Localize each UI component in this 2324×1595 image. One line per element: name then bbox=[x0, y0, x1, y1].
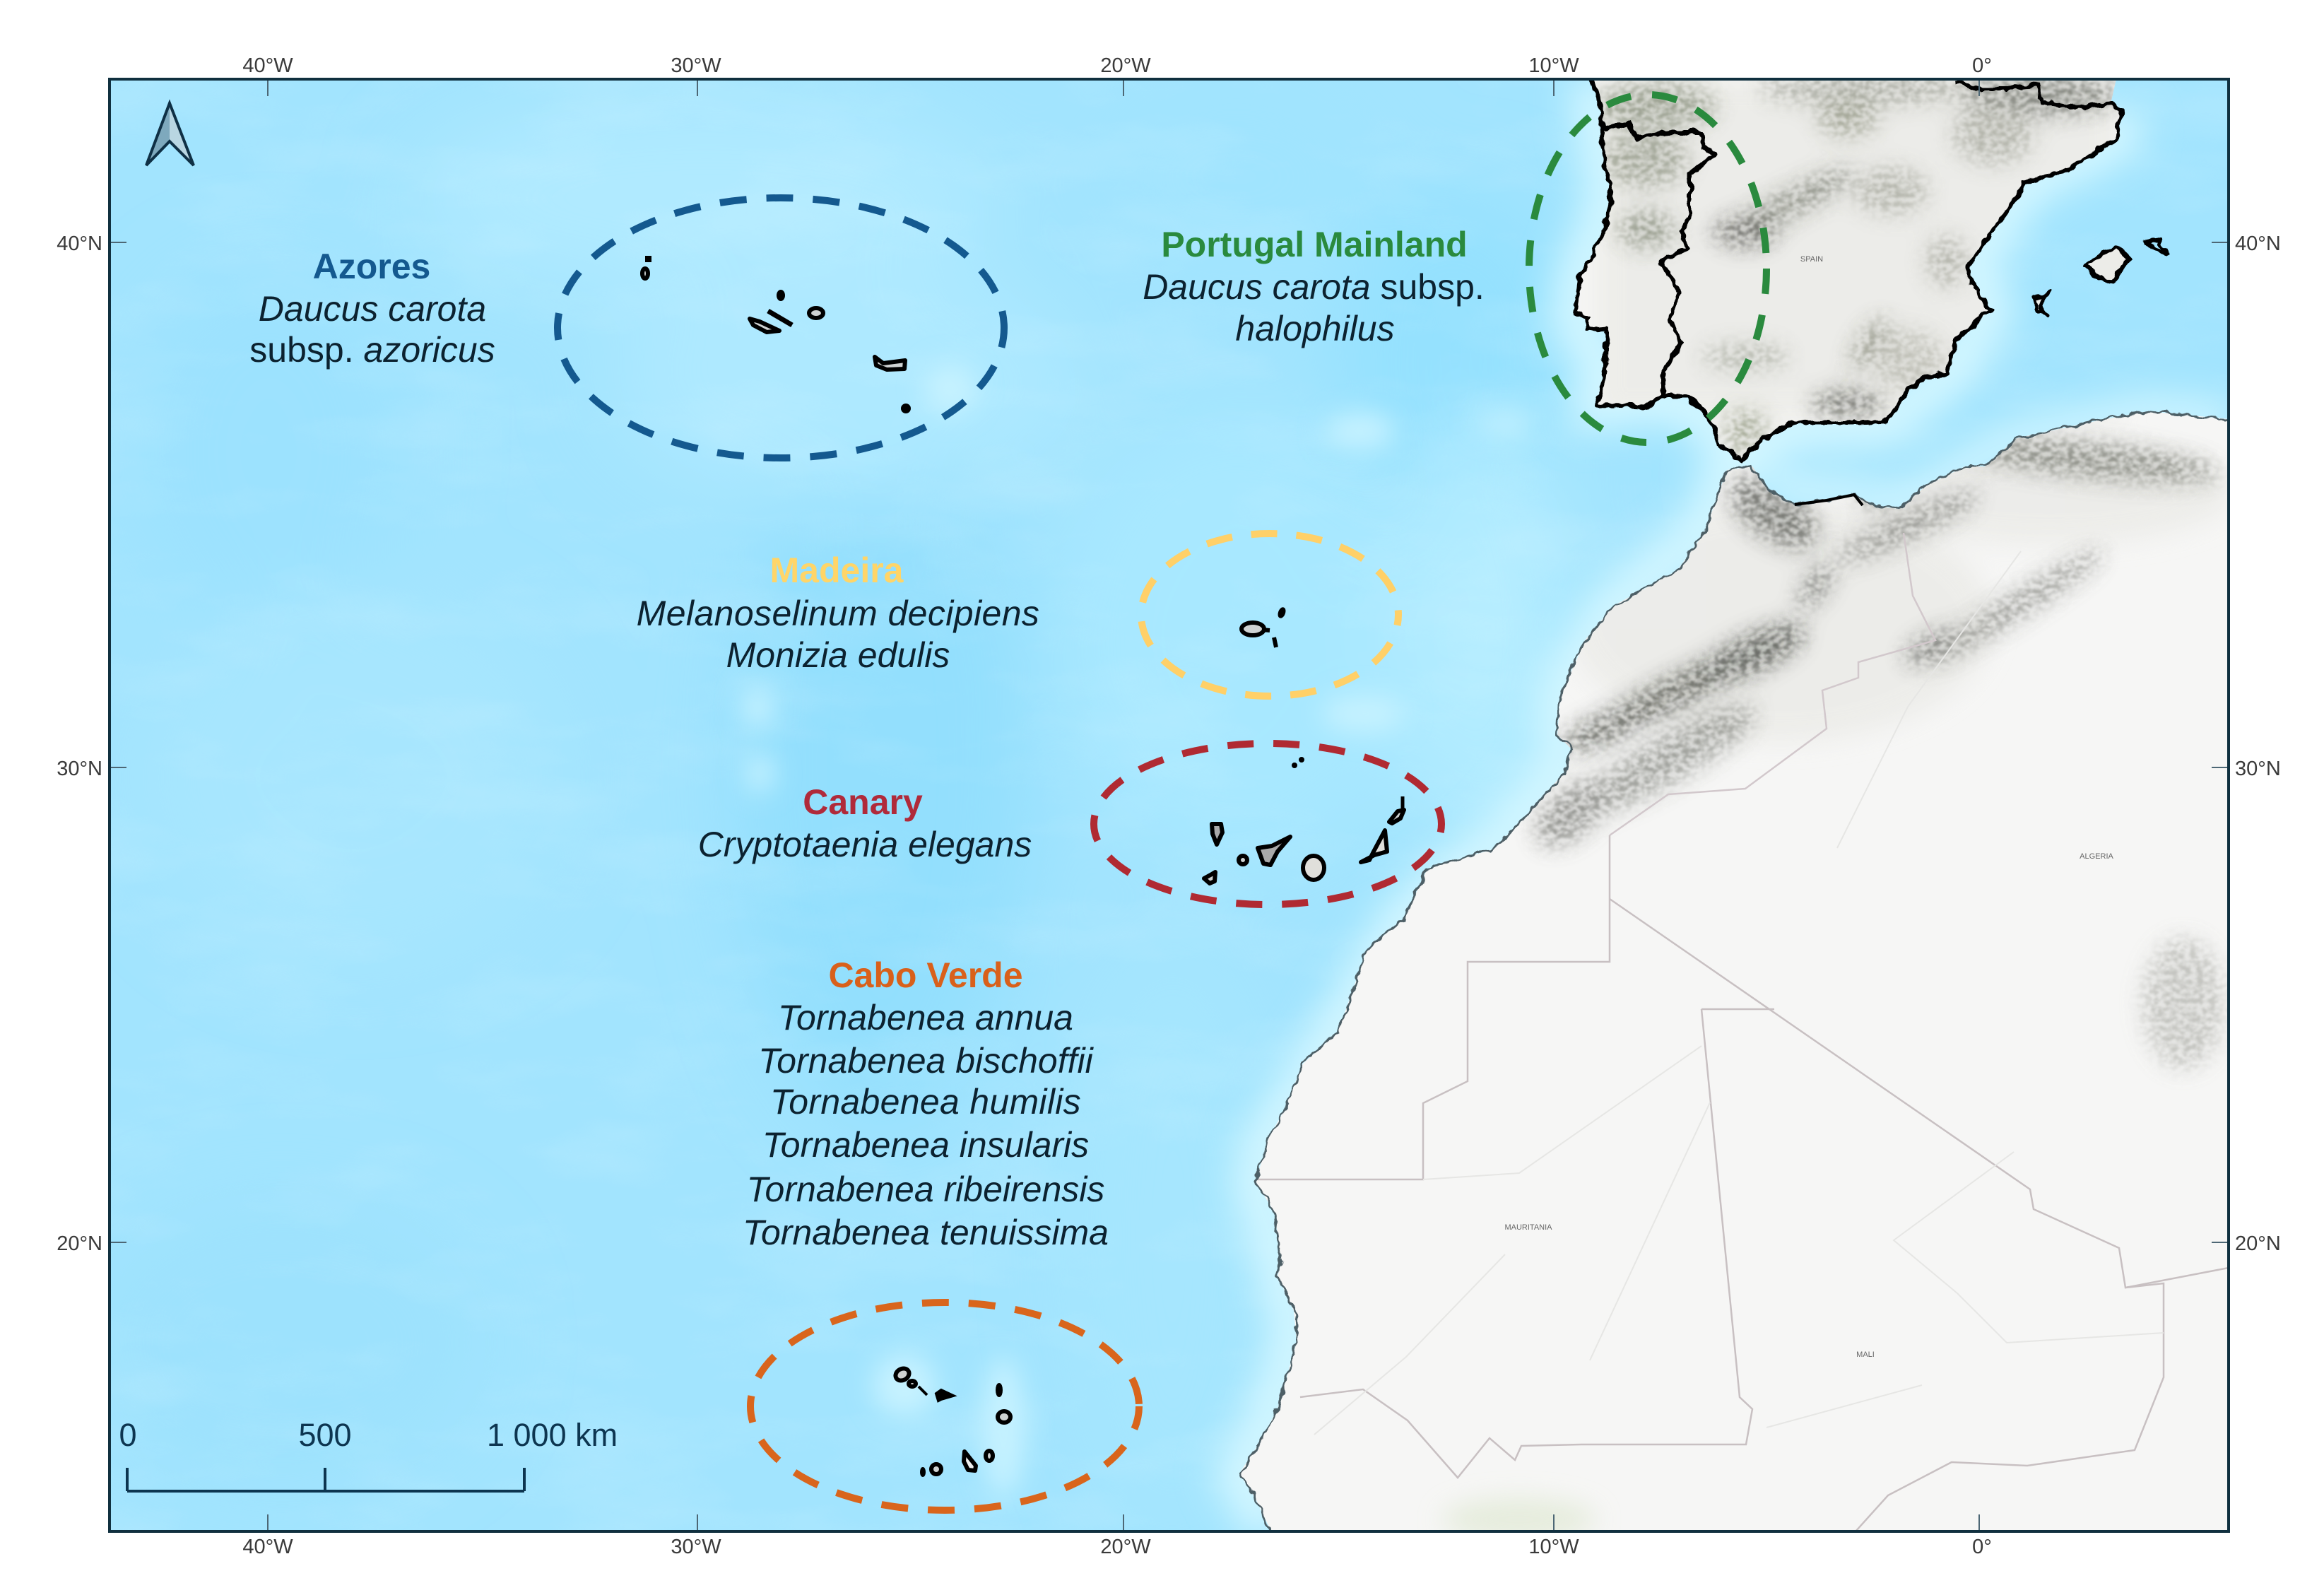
label: Cabo Verde bbox=[743, 955, 1109, 1252]
left latitude labels: 30°N bbox=[57, 758, 102, 780]
label: Madeira: Madeira bbox=[770, 551, 904, 590]
label: Azores: subsp. azoricus bbox=[249, 330, 495, 370]
dashed ellipse: Portugal Mainland bbox=[1529, 95, 1766, 442]
islands: Canary bbox=[1204, 758, 1404, 883]
scale bar: 0 bbox=[119, 1417, 137, 1453]
bottom longitude labels bbox=[242, 1536, 1992, 1558]
coast of Africa bbox=[1239, 411, 2229, 1531]
label: Portugal Mainland: halophilus bbox=[1235, 309, 1395, 348]
label: Azores: Daucus carota bbox=[259, 289, 486, 329]
map labels bbox=[1504, 255, 2114, 1359]
label: Portugal Mainland: Portugal Mainland bbox=[1161, 225, 1468, 264]
label: Portugal Mainland: Daucus carota subsp. bbox=[1143, 267, 1485, 307]
dashed ellipse: Madeira bbox=[1141, 534, 1398, 696]
bottom longitude labels: 10°W bbox=[1528, 1536, 1579, 1558]
top longitude labels bbox=[242, 54, 1992, 77]
hillshade relief bbox=[1441, 74, 2233, 1541]
dashed ellipse: Azores bbox=[558, 198, 1004, 458]
right latitude labels: 30°N bbox=[2235, 758, 2281, 780]
scale bar: 500 bbox=[298, 1417, 352, 1453]
label: Cabo Verde: Cabo Verde bbox=[828, 955, 1023, 995]
top longitude labels: 0° bbox=[1972, 54, 1992, 77]
scale bar bbox=[119, 1417, 618, 1491]
bottom longitude labels: 20°W bbox=[1100, 1536, 1151, 1558]
bottom longitude labels: 0° bbox=[1972, 1536, 1992, 1558]
label: Madeira: Melanoselinum decipiens bbox=[637, 594, 1039, 633]
islands: Madeira bbox=[1241, 608, 1285, 647]
map labels: SPAIN bbox=[1800, 255, 1823, 264]
map labels: ALGERIA bbox=[2080, 852, 2114, 861]
country borders: Africa bbox=[1256, 533, 2229, 1531]
top longitude labels: 20°W bbox=[1100, 54, 1151, 77]
label: Portugal Mainland bbox=[1143, 225, 1485, 348]
map labels: MALI bbox=[1856, 1350, 1875, 1359]
label: Cabo Verde: Tornabenea annua bbox=[778, 998, 1073, 1037]
coastal shelf glow bbox=[1239, 79, 2229, 1531]
left latitude labels: 40°N bbox=[57, 233, 102, 255]
label: Canary bbox=[698, 782, 1032, 864]
dashed ellipse: Canary bbox=[1094, 743, 1441, 905]
Balearic Islands bbox=[2033, 240, 2167, 317]
bottom longitude labels: 30°W bbox=[671, 1536, 721, 1558]
right latitude labels bbox=[2235, 233, 2281, 1255]
map labels: MAURITANIA bbox=[1504, 1223, 1552, 1232]
label: Cabo Verde: Tornabenea humilis bbox=[770, 1082, 1081, 1122]
label: Canary: Canary bbox=[803, 782, 923, 822]
label: Azores: Azores bbox=[313, 247, 430, 286]
label: Cabo Verde: Tornabenea insularis bbox=[762, 1125, 1089, 1165]
icon: north arrow bbox=[146, 103, 194, 165]
Mediterranean coast detail bbox=[1795, 495, 1863, 505]
top longitude labels: 40°W bbox=[242, 54, 293, 77]
right latitude labels: 20°N bbox=[2235, 1232, 2281, 1255]
land: Iberia and Africa bbox=[1201, 74, 2233, 1541]
label: Cabo Verde: Tornabenea tenuissima bbox=[743, 1213, 1109, 1252]
Iberia outline bbox=[1575, 79, 2121, 460]
islands: Cabo Verde bbox=[893, 1366, 1010, 1476]
right latitude labels: 40°N bbox=[2235, 233, 2281, 255]
top longitude labels: 10°W bbox=[1528, 54, 1579, 77]
label: Madeira bbox=[637, 551, 1039, 675]
label: Cabo Verde: Tornabenea ribeirensis bbox=[747, 1170, 1104, 1209]
dashed ellipse: Cabo Verde bbox=[750, 1302, 1139, 1510]
label: Cabo Verde: Tornabenea bischoffii bbox=[758, 1041, 1095, 1081]
scale bar: 1 000 km bbox=[487, 1417, 618, 1453]
left latitude labels bbox=[57, 233, 102, 1255]
label: Azores bbox=[249, 247, 495, 370]
top longitude labels: 30°W bbox=[671, 54, 721, 77]
islands: Azores bbox=[642, 257, 909, 412]
label: Madeira: Monizia edulis bbox=[726, 635, 950, 675]
label: Canary: Cryptotaenia elegans bbox=[698, 825, 1032, 864]
bottom longitude labels: 40°W bbox=[242, 1536, 293, 1558]
left latitude labels: 20°N bbox=[57, 1232, 102, 1255]
